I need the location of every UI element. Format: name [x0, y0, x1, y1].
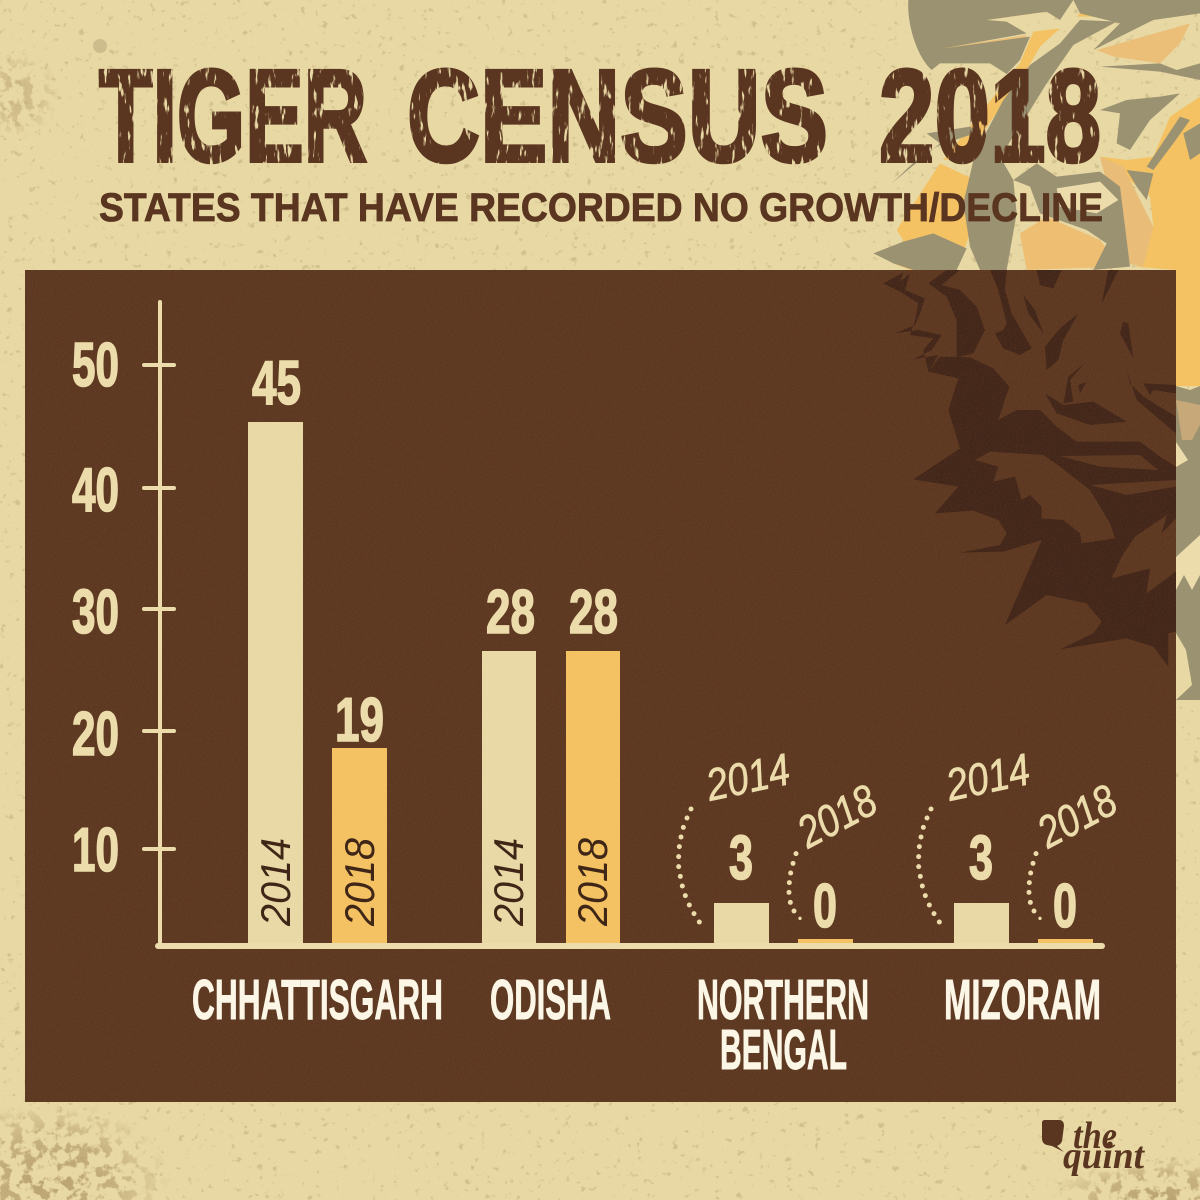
- bars: Odisha: 2014: [485, 838, 532, 927]
- y axis labels: 10: [72, 816, 119, 885]
- tiger grey stripes: [873, 0, 1200, 270]
- bars: Northern Bengal: 2014: [701, 743, 794, 811]
- bars: Odisha: 28: [569, 578, 618, 647]
- mane main mass: [913, 357, 1176, 667]
- tiger illustration: top right: [874, 0, 1200, 270]
- subtitle: STATES THAT HAVE RECORDED NO GROWTH/DECLINE: [99, 186, 1103, 230]
- forehead stripes: [883, 270, 1176, 433]
- dotted arcs: Northern Bengal: [676, 806, 802, 924]
- state labels: NORTHERN: [697, 968, 869, 1032]
- x axis: [158, 943, 1102, 949]
- bars: Chhattisgarh: 2014: [252, 838, 299, 927]
- bars: Northern Bengal: [701, 743, 885, 946]
- y axis labels: [72, 331, 119, 885]
- y axis labels: 20: [72, 700, 119, 769]
- bars: Odisha: [482, 578, 620, 946]
- bars: Mizoram: 2018: [1028, 774, 1125, 858]
- logo: the quint: quint: [1063, 1135, 1145, 1177]
- title: [99, 42, 1101, 189]
- bars: Mizoram: 3: [969, 824, 993, 893]
- y axis labels: 40: [72, 456, 119, 525]
- tiger illustration: right edge: [1176, 270, 1200, 700]
- bars: Chhattisgarh: 2018: [336, 837, 383, 927]
- bars: Mizoram: 2014: [941, 743, 1034, 811]
- bars: Chhattisgarh: [248, 349, 387, 946]
- bars: Mizoram: 0: [1053, 872, 1077, 941]
- dotted arcs: Mizoram: [916, 806, 1042, 924]
- bars: Chhattisgarh: 45: [252, 349, 301, 418]
- logo: the quint: [1042, 1115, 1145, 1177]
- state labels: CHHATTISGARH: [192, 968, 443, 1032]
- tiger silhouette on panel: [883, 270, 1176, 667]
- panel grain: [25, 270, 1176, 1102]
- state labels: [192, 968, 1101, 1082]
- state labels: BENGAL: [720, 1018, 847, 1082]
- logo: the quint: the: [1073, 1115, 1117, 1157]
- y axis: [144, 302, 174, 945]
- state labels: ODISHA: [490, 968, 611, 1032]
- bars: Odisha: 28: [486, 578, 535, 647]
- tiger orange fur areas: [894, 12, 1200, 270]
- bars: Odisha: 2018: [569, 837, 616, 927]
- title: TIGER: [99, 42, 367, 189]
- bars: Northern Bengal: 2018: [788, 774, 885, 858]
- bars: Mizoram: [941, 743, 1125, 946]
- panel: chart background: [25, 270, 1176, 1102]
- tiger eye: [1057, 182, 1118, 213]
- bars: Chhattisgarh: 19: [335, 686, 384, 755]
- title: 2018: [879, 42, 1101, 189]
- title: CENSUS: [407, 42, 828, 189]
- y axis labels: 50: [72, 331, 119, 400]
- bars: Northern Bengal: 0: [813, 872, 837, 941]
- bars: Northern Bengal: 3: [729, 824, 753, 893]
- y axis labels: 30: [72, 578, 119, 647]
- mane brown gaps: [975, 452, 1176, 593]
